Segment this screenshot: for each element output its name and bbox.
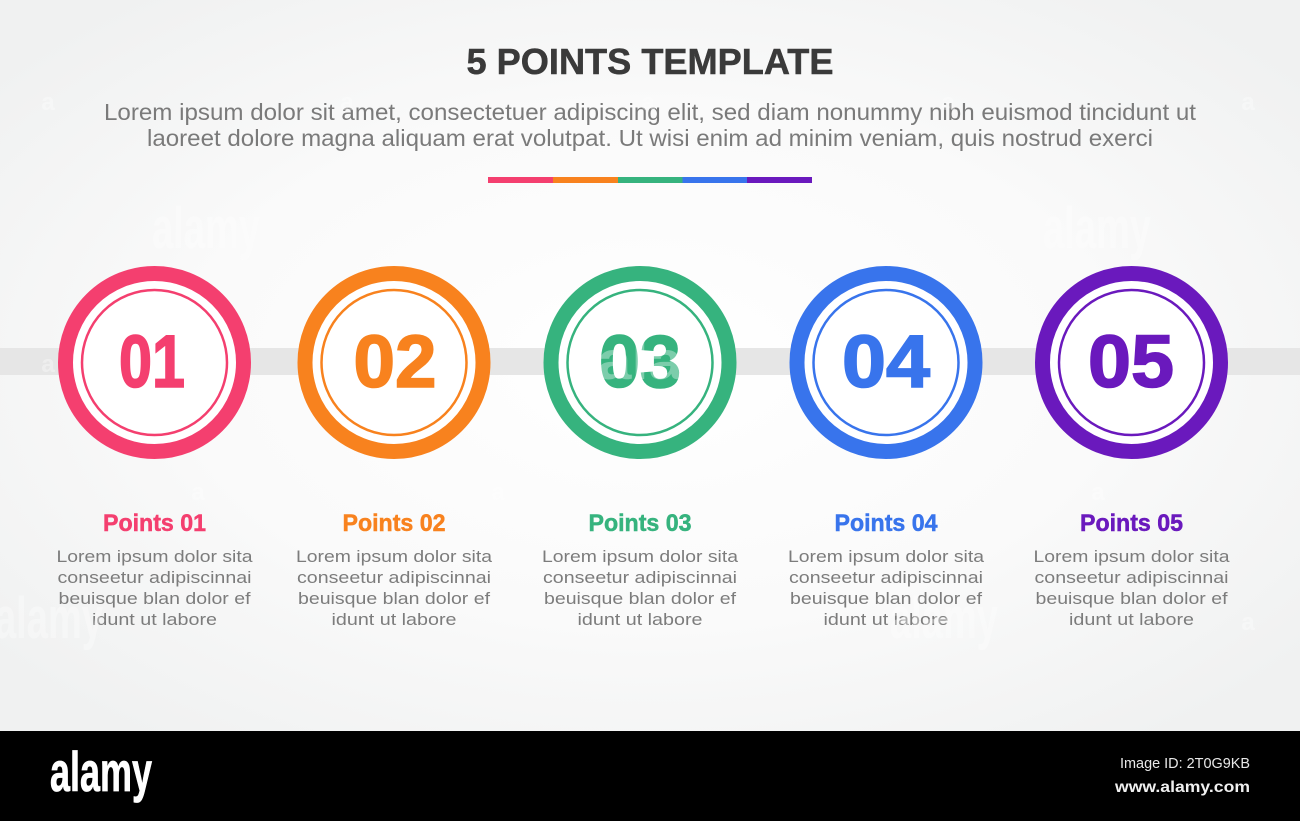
point 02 text: Lorem ipsum dolor sita: [296, 547, 493, 566]
watermarks: a: [1241, 609, 1255, 636]
point 05 text: Lorem ipsum dolor sita: [1034, 547, 1230, 566]
point 05 text: beuisque blan dolor ef: [1036, 589, 1228, 608]
website: www.alamy.com: [1114, 779, 1250, 796]
point 03 text: idunt ut labore: [578, 610, 702, 629]
point 05 circle: 05: [1088, 320, 1174, 403]
watermarks: a: [941, 89, 955, 116]
point 03 text: Lorem ipsum dolor sita: [542, 547, 739, 566]
point 04 text: beuisque blan dolor ef: [790, 589, 982, 608]
point 04 text: idunt ut labore: [824, 610, 948, 629]
point 01 text: Lorem ipsum dolor sita: [56, 547, 253, 566]
intro text: laoreet dolore magna aliquam erat volutpat. Ut wisi enim ad minim veniam, quis nostrud exerci: [147, 125, 1153, 151]
watermarks: a: [191, 479, 205, 506]
watermarks: a: [1241, 89, 1255, 116]
point 01 circle: 01: [119, 320, 185, 403]
intro text: Lorem ipsum dolor sit amet, consectetuer adipiscing elit, sed diam nonummy nibh euismod tincidunt ut: [104, 99, 1197, 125]
point 05 text: conseetur adipiscinnai: [1034, 568, 1228, 587]
intro text: [104, 99, 1197, 151]
watermarks: a: [491, 479, 505, 506]
point 04 text: Lorem ipsum dolor sita: [788, 547, 985, 566]
point 05 text: Points 05: [1080, 510, 1183, 537]
watermarks: alamy: [152, 196, 260, 261]
point 02 text: Points 02: [342, 510, 446, 537]
point 04 text: Points 04: [834, 510, 938, 537]
watermarks: alamy: [1043, 196, 1151, 261]
image id: Image ID: 2T0G9KB: [1120, 755, 1250, 772]
point 02 circle: 02: [354, 320, 436, 403]
point 01 text: beuisque blan dolor ef: [58, 589, 251, 608]
point 01 text: [56, 510, 253, 629]
point 01 text: Points 01: [103, 510, 206, 537]
horizontal connector bar: [0, 348, 1300, 375]
point 05 circle: [1042, 274, 1220, 452]
point 03 text: Points 03: [588, 510, 692, 537]
watermarks: a: [1091, 479, 1105, 506]
point 03 circle: 03: [599, 320, 681, 403]
point 03 circle: [551, 274, 729, 452]
point 01 text: idunt ut labore: [92, 610, 217, 629]
point 04 text: conseetur adipiscinnai: [789, 568, 983, 587]
watermarks: a: [641, 89, 655, 116]
point 04 text: [788, 510, 985, 629]
point 05 text: idunt ut labore: [1069, 610, 1194, 629]
footer band: [0, 731, 1300, 821]
watermarks: a: [340, 89, 354, 116]
point 04 circle: [797, 274, 975, 452]
point 01 text: conseetur adipiscinnai: [58, 568, 252, 587]
title: 5 POINTS TEMPLATE: [466, 41, 834, 82]
point 04 circle: 04: [842, 320, 930, 403]
point 03 text: [542, 510, 739, 629]
point 05 text: [1034, 510, 1230, 629]
point 02 text: [296, 510, 493, 629]
watermarks: [0, 89, 1255, 651]
point 02 text: idunt ut labore: [332, 610, 456, 629]
watermarks: a: [41, 351, 55, 378]
point 01 circle: [66, 274, 244, 452]
point 02 text: conseetur adipiscinnai: [297, 568, 491, 587]
point 02 circle: [305, 274, 483, 452]
point 03 circle: ala: [597, 331, 684, 391]
point 03 text: beuisque blan dolor ef: [544, 589, 736, 608]
multicolour divider: [488, 177, 812, 183]
watermarks: a: [41, 89, 55, 116]
footer logo: alamy: [50, 740, 152, 803]
point 02 text: beuisque blan dolor ef: [298, 589, 490, 608]
watermarks: alamy: [890, 586, 998, 651]
point 03 text: conseetur adipiscinnai: [543, 568, 737, 587]
